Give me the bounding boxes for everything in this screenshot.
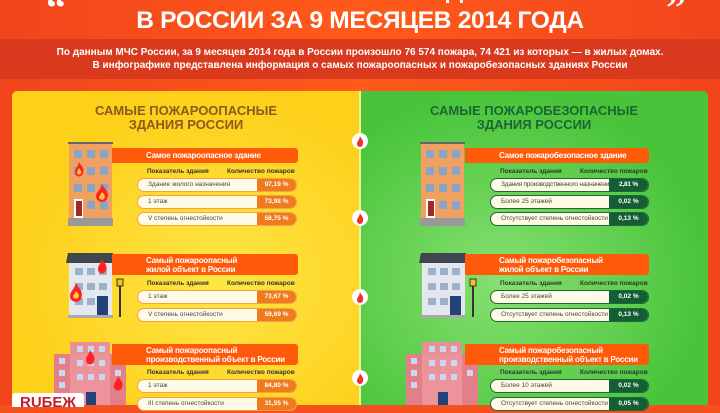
bar: most dangerous building: Самое пожароопасное здание <box>146 151 261 160</box>
text: Количество пожаров <box>580 280 648 287</box>
text: V степень огнестойкости <box>148 311 223 318</box>
bar: industrial dangerous <box>112 344 298 365</box>
text: 84,80 % <box>265 382 288 389</box>
text: 0,02 % <box>618 198 639 205</box>
text: 31,55 % <box>265 400 288 407</box>
bar: residential dangerous <box>112 254 298 275</box>
column labels 3: Показатель здания <box>147 369 209 376</box>
rows: industrial safe <box>490 379 649 411</box>
text: 1 этаж <box>148 293 167 300</box>
icon: orange building right <box>420 142 465 226</box>
bar: industrial dangerous: производственный объект в России <box>146 354 285 364</box>
rows: industrial dangerous <box>137 379 297 411</box>
heading: dangerous: САМЫЕ ПОЖАРООПАСНЫЕ <box>95 103 277 118</box>
text: Отсутствует степень огнестойкости <box>501 215 608 222</box>
text: Количество пожаров <box>580 168 648 175</box>
icon: fire divider 2 <box>352 210 368 226</box>
text: 0,13 % <box>618 311 639 318</box>
text: 2,81 % <box>619 181 638 188</box>
column labels: Показатель здания <box>147 168 209 175</box>
icon: fire divider 1 <box>352 133 368 149</box>
text: Более 25 этажей <box>501 293 552 300</box>
column labels right: Показатель здания <box>500 168 562 175</box>
heading: safe: ЗДАНИЯ РОССИИ <box>477 117 591 132</box>
icon: industrial building left <box>54 342 126 405</box>
icon: orange building left <box>68 142 113 226</box>
text: Отсутствует степень огнестойкости <box>501 400 608 407</box>
heading: dangerous: ЗДАНИЯ РОССИИ <box>129 117 243 132</box>
text: Количество пожаров <box>227 280 295 287</box>
logo: RUБЕЖ: RUБЕЖ <box>20 394 76 411</box>
text: 1 этаж <box>148 198 167 205</box>
column labels 2: Показатель здания <box>147 280 209 287</box>
subtitle band <box>0 39 720 79</box>
icon: fire divider 4 <box>352 370 368 386</box>
subtitle band: В инфографике представлена информация о самых пожароопасных и пожаробезопасных зданиях России <box>92 60 628 71</box>
bar: residential safe: Самый пожаробезопасный <box>499 256 603 264</box>
text: V степень огнестойкости <box>148 215 223 222</box>
bar: industrial safe <box>465 344 649 365</box>
text: 0,05 % <box>618 400 639 407</box>
bar: residential dangerous: Самый пожароопасный <box>146 256 237 264</box>
bar: safest building: Самое пожаробезопасное здание <box>499 151 626 160</box>
panel: dangerous <box>12 91 360 405</box>
panel: safe <box>360 91 708 405</box>
icon: residential building right <box>419 253 476 318</box>
icon: residential building left <box>66 253 124 318</box>
text: Более 25 этажей <box>501 198 552 205</box>
rows: safest building <box>490 178 649 226</box>
text: Отсутствует степень огнестойкости <box>501 311 608 318</box>
text: 97,19 % <box>265 181 288 188</box>
bar: industrial safe: производственный объект в России <box>499 354 638 364</box>
bar: industrial dangerous: Самый пожароопасный <box>146 346 237 354</box>
rows: residential safe <box>490 290 649 322</box>
text: Количество пожаров <box>227 168 295 175</box>
bar: most dangerous building <box>112 148 298 163</box>
text: 73,67 % <box>265 293 288 300</box>
bar: residential dangerous: жилой объект в России <box>146 264 235 274</box>
rows: most dangerous building <box>137 178 297 226</box>
rows: residential dangerous <box>137 290 297 322</box>
text: 1 этаж <box>148 382 167 389</box>
text: III степень огнестойкости <box>148 400 224 407</box>
text: 59,69 % <box>265 311 288 318</box>
logo: RUБЕЖ <box>12 393 84 407</box>
text: Количество пожаров <box>227 369 295 376</box>
column labels right 3: Показатель здания <box>500 369 562 376</box>
text: Количество пожаров <box>580 369 648 376</box>
bar: industrial safe: Самый пожаробезопасный <box>499 346 603 354</box>
heading: safe <box>430 103 638 132</box>
text: 0,02 % <box>618 293 639 300</box>
text: 0,02 % <box>618 382 639 389</box>
text: Здание жилого назначения <box>148 181 230 188</box>
text: Более 10 этажей <box>501 382 552 389</box>
bar: safest building <box>465 148 649 163</box>
icon: industrial building right <box>406 342 478 405</box>
text: 73,98 % <box>265 198 288 205</box>
subtitle band: По данным МЧС России, за 9 месяцев 2014 года в России произошло 76 574 пожара, 74 421 из которых — в жилых домах. <box>57 47 663 58</box>
bar: residential safe <box>465 254 649 275</box>
title: В РОССИИ ЗА 9 МЕСЯЦЕВ 2014 ГОДА <box>136 7 584 34</box>
icon: fire divider 3 <box>352 289 368 305</box>
divider <box>359 91 361 405</box>
text: 0,13 % <box>618 215 639 222</box>
bar: residential safe: жилой объект в России <box>499 264 588 274</box>
heading: safe: САМЫЕ ПОЖАРОБЕЗОПАСНЫЕ <box>430 103 638 118</box>
column labels right 2: Показатель здания <box>500 280 562 287</box>
heading: dangerous <box>95 103 277 132</box>
text: 58,75 % <box>265 215 288 222</box>
text: Здания производственного назначения <box>501 181 612 188</box>
